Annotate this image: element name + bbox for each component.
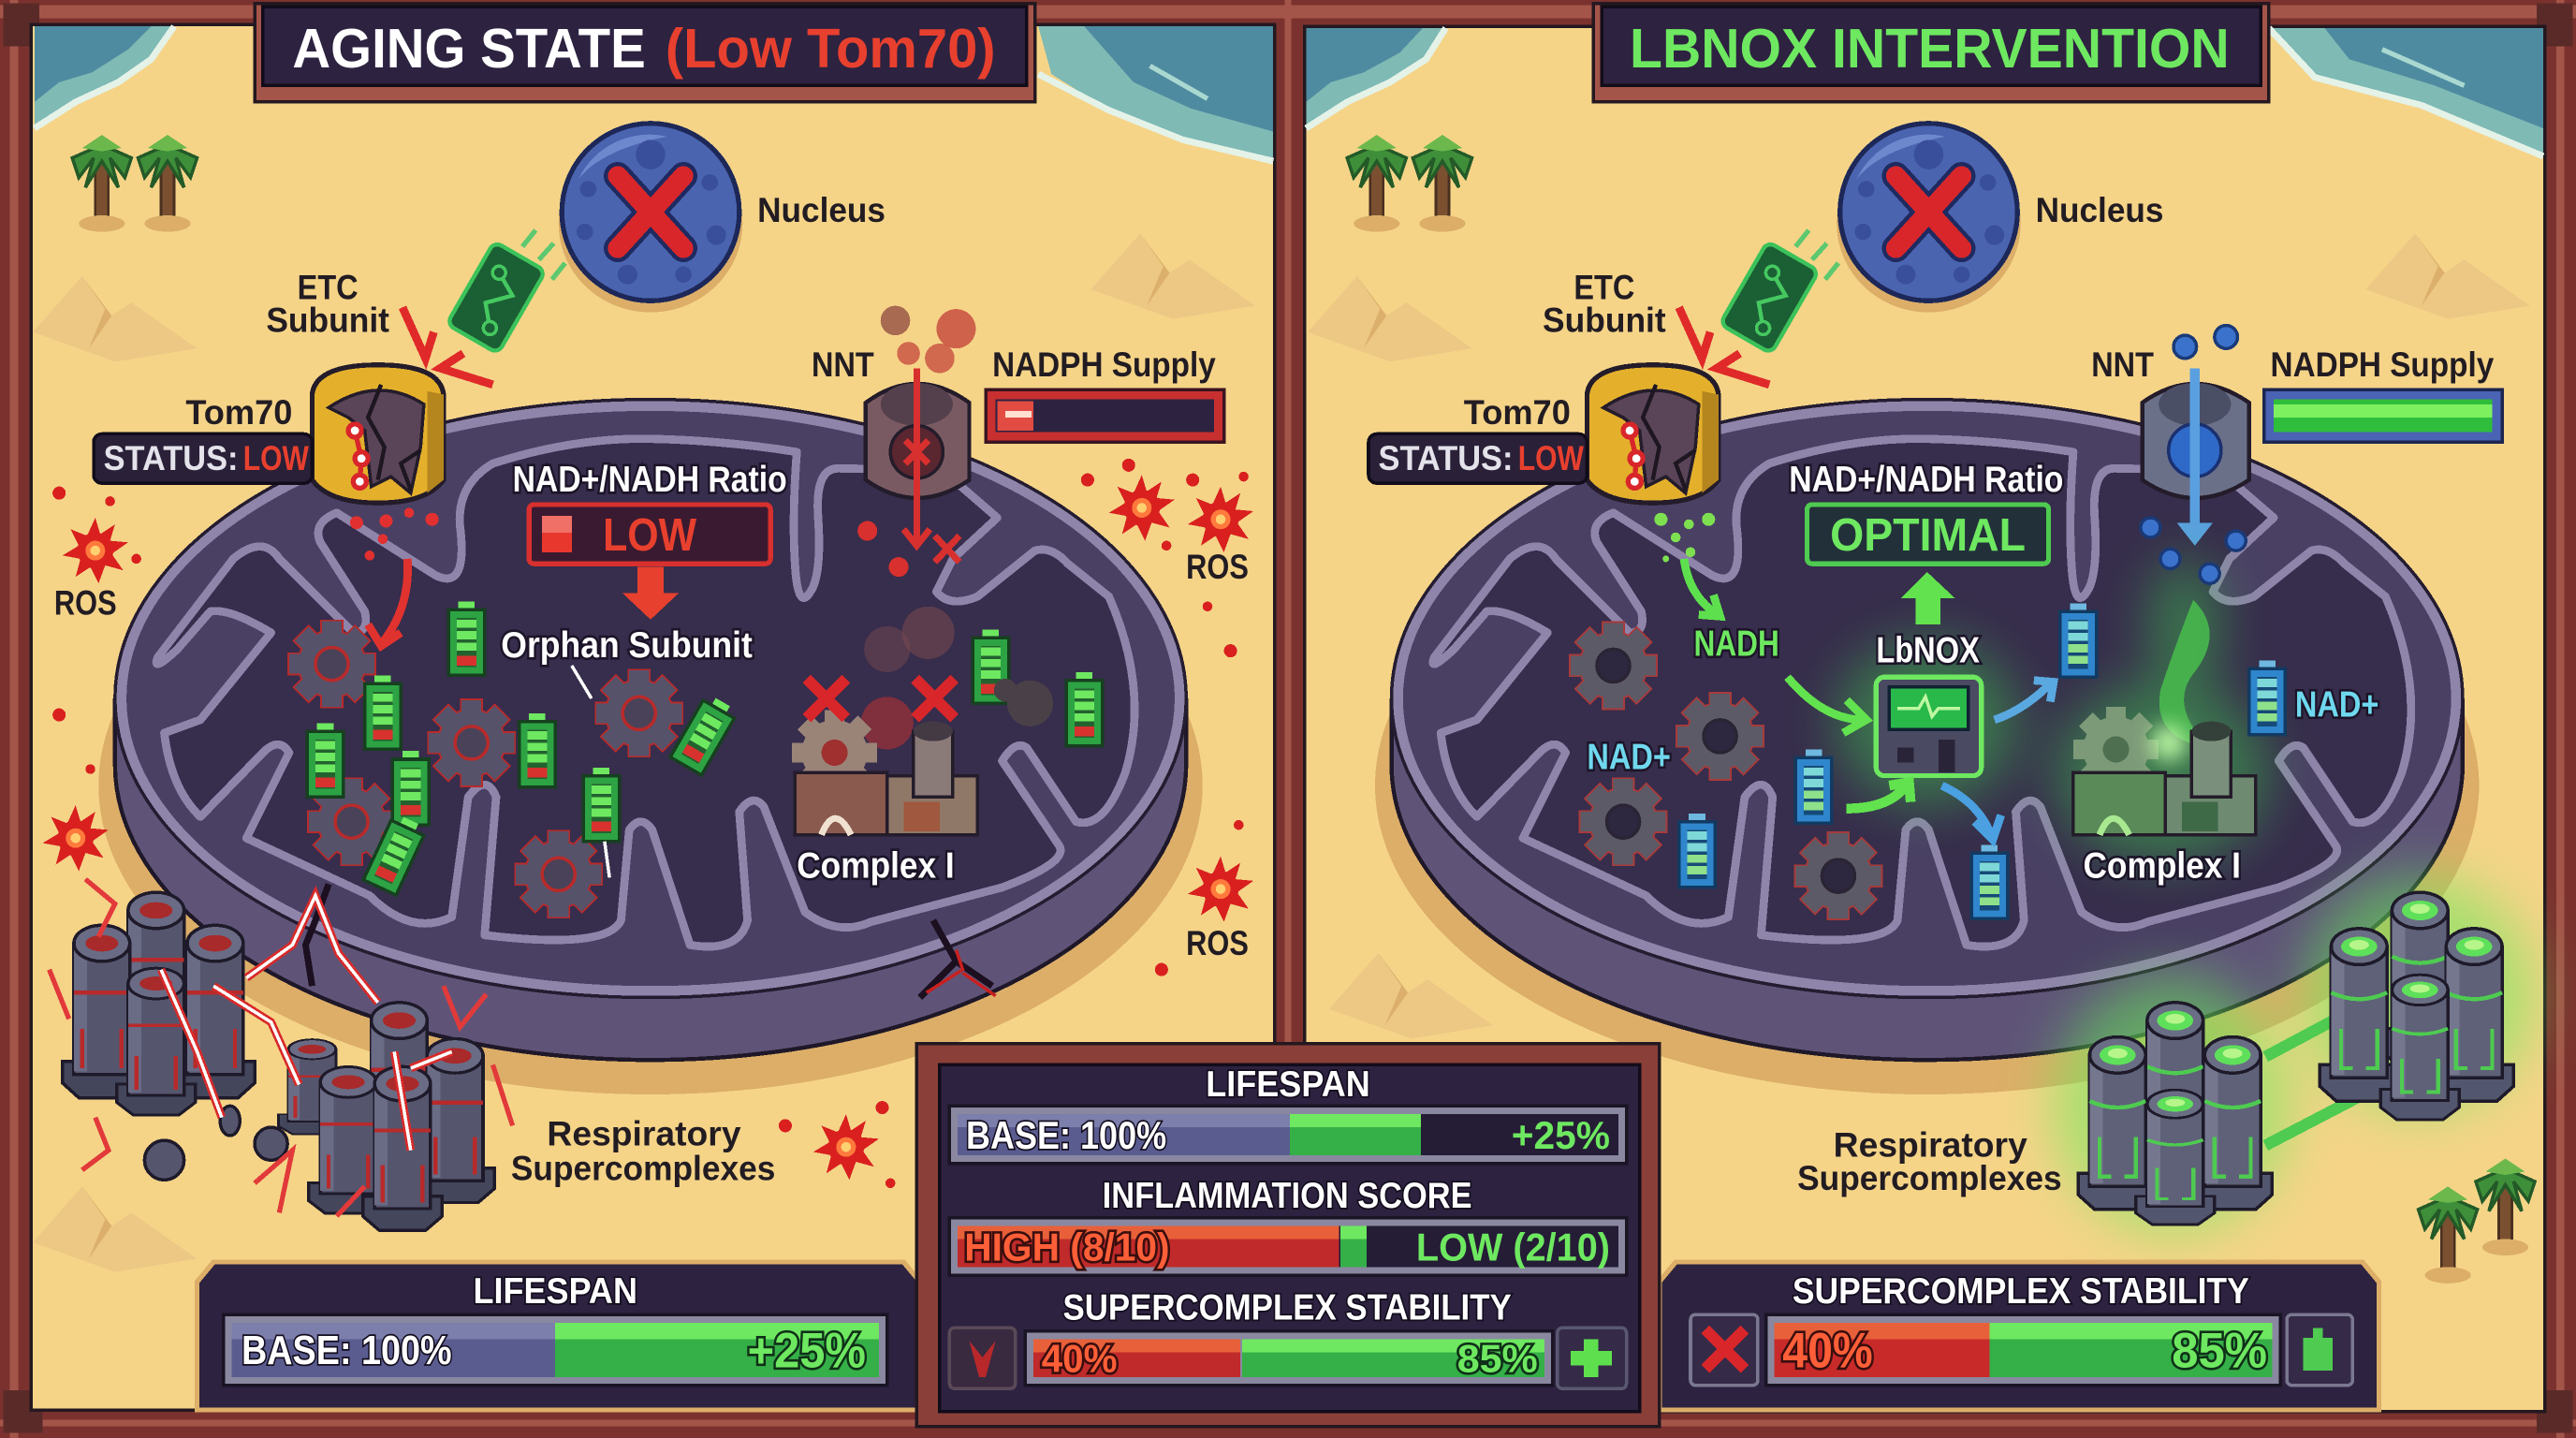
labels: lbnox panel: ETC bbox=[1573, 269, 1634, 307]
panel: aging lifespan: LIFESPAN bbox=[473, 1271, 637, 1312]
NADH ratio LOW box: LOW bbox=[603, 510, 697, 561]
labels: aging panel: ROS bbox=[1186, 548, 1249, 586]
labels: lbnox panel: Supercomplexes bbox=[1797, 1159, 2062, 1197]
labels: lbnox panel: NNT bbox=[2091, 345, 2154, 384]
icon: ETC subunit card, aging bbox=[446, 242, 546, 354]
panel: aging state sand background bbox=[31, 24, 1275, 1410]
title: aging bbox=[255, 4, 1035, 102]
inflammation row: HIGH (8/10) bbox=[964, 1225, 1170, 1269]
labels: aging panel: NADPH Supply bbox=[992, 345, 1216, 384]
panel: lbnox stability bbox=[1660, 1262, 2378, 1410]
labels: lbnox panel: Tom70 bbox=[1464, 393, 1571, 432]
panel: aging lifespan bbox=[198, 1262, 920, 1410]
Tom70 channel: aging bbox=[312, 365, 444, 503]
complex I: lbnox bbox=[2073, 707, 2256, 835]
labels: lbnox panel: Respiratory bbox=[1834, 1126, 2027, 1165]
labels: aging panel bbox=[54, 191, 1249, 1187]
panel: aging lifespan: +25% bbox=[748, 1323, 866, 1378]
icon: ETC subunit card, lbnox bbox=[1720, 242, 1819, 354]
palm trees bbox=[72, 135, 2535, 1284]
green fragments below Tom70 bbox=[1654, 513, 1715, 562]
Tom70 channel: lbnox bbox=[1587, 365, 1719, 503]
blue molecules below NNT bbox=[2141, 518, 2246, 583]
labels: aging panel: Respiratory bbox=[547, 1114, 741, 1152]
stability row: SUPERCOMPLEX STABILITY bbox=[1063, 1287, 1512, 1328]
arrow: out to battery upper bbox=[1995, 681, 2054, 720]
mitochondrion: lbnox bbox=[1375, 400, 2479, 1094]
labels: aging panel: Tom70 bbox=[185, 393, 292, 432]
leader lines: orphan subunit bbox=[572, 666, 609, 877]
NADH ratio LOW box bbox=[529, 505, 770, 564]
interior aging: batteries bbox=[305, 602, 1104, 897]
labels: lbnox interior bbox=[1587, 460, 2378, 886]
labels: lbnox panel bbox=[1464, 191, 2495, 1197]
smoke cloud right, aging bbox=[994, 679, 1053, 726]
water: right panel top left bbox=[1306, 28, 1445, 128]
labels: aging interior: Orphan Subunit bbox=[501, 625, 753, 666]
labels: aging panel: ROS bbox=[54, 584, 117, 623]
fragments below NNT, aging bbox=[857, 521, 959, 577]
title: lbnox bbox=[1593, 4, 2269, 102]
water foam: right panel top left bbox=[1306, 28, 1445, 128]
inflammation row: LOW (2/10) bbox=[1416, 1225, 1610, 1269]
panel: lbnox stability: 40% bbox=[1782, 1323, 1873, 1378]
title: aging: (Low Tom70) bbox=[666, 17, 996, 80]
labels: lbnox interior: NAD+/NADH Ratio bbox=[1789, 460, 2063, 500]
beams between supercomplexes bbox=[2265, 1005, 2389, 1145]
LbNOX machine bbox=[1876, 677, 1982, 776]
green glow around LbNOX and complex I bbox=[1837, 559, 2269, 863]
labels: lbnox interior: NAD+ bbox=[2295, 684, 2378, 725]
OPTIMAL box: OPTIMAL bbox=[1830, 510, 2026, 561]
water deep: left panel top left bbox=[35, 26, 151, 102]
stability row: 85% bbox=[1457, 1337, 1538, 1381]
panel: lbnox stability: 85% bbox=[2172, 1323, 2267, 1378]
cracks red edge bbox=[927, 950, 996, 996]
arrow: low ratio down bbox=[622, 567, 679, 620]
cracks in aging mitochondrion wall bbox=[305, 884, 992, 997]
arrow: NADH into LbNOX bbox=[1788, 677, 1866, 733]
arrow: fragments to gear bbox=[368, 559, 408, 646]
title: lbnox: LBNOX INTERVENTION bbox=[1630, 17, 2230, 80]
status badge: aging bbox=[94, 433, 312, 483]
green smoke bbox=[2159, 600, 2210, 748]
card motion streaks, aging bbox=[522, 230, 565, 280]
labels: aging interior: Complex I bbox=[797, 845, 955, 886]
labels: aging panel: Supercomplexes bbox=[511, 1149, 775, 1187]
card motion streaks, lbnox bbox=[1795, 230, 1838, 280]
labels: aging interior bbox=[501, 460, 955, 886]
NADPH bar: aging bbox=[986, 389, 1224, 442]
status badge: lbnox bbox=[1368, 433, 1587, 483]
nucleus: lbnox bbox=[1837, 124, 2021, 313]
panel: center comparison frame bbox=[916, 1044, 1660, 1427]
NADPH bar: lbnox bbox=[2264, 389, 2502, 442]
water deep: right panel top left bbox=[1306, 28, 1423, 102]
panel: aging lifespan: BASE: 100% bbox=[242, 1328, 452, 1373]
complex I: aging bbox=[792, 607, 977, 835]
stability row bbox=[949, 1287, 1627, 1388]
status badge: lbnox: LOW bbox=[1518, 439, 1584, 477]
ROS particles: aging panel bbox=[43, 459, 1253, 1188]
lifespan row bbox=[949, 1064, 1627, 1164]
icon: red chevrons, lbnox bbox=[1679, 307, 1769, 385]
supercomplexes: lbnox bbox=[2078, 892, 2513, 1225]
labels: lbnox panel: Subunit bbox=[1543, 301, 1666, 340]
supercomplexes: aging bbox=[63, 892, 494, 1230]
red fragments below Tom70 bbox=[350, 507, 439, 561]
arrow: green loop lower bbox=[1847, 783, 1910, 809]
nucleus: aging bbox=[559, 124, 742, 313]
lightning: aging supercomplexes bbox=[50, 879, 513, 1216]
sand dunes bbox=[33, 233, 2530, 1272]
arrow: up to optimal bbox=[1901, 572, 1955, 624]
water: left panel top right bbox=[1038, 26, 1273, 161]
interior lbnox: batteries bbox=[1677, 603, 2287, 920]
water: top left bbox=[35, 26, 174, 128]
arrow: blue to lower battery bbox=[1942, 785, 2001, 840]
panel: lbnox sand background bbox=[1305, 26, 2545, 1412]
arrow: to NADH bbox=[1684, 559, 1720, 616]
labels: lbnox panel: Nucleus bbox=[2036, 191, 2163, 229]
labels: aging panel: Nucleus bbox=[757, 191, 886, 229]
NNT channel: aging bbox=[866, 306, 976, 546]
labels: aging panel: ROS bbox=[1186, 924, 1249, 962]
water: right panel top right bbox=[2269, 28, 2543, 156]
red X marks on complex I bbox=[807, 679, 955, 718]
status badge: aging: LOW bbox=[243, 439, 309, 477]
lifespan row: LIFESPAN bbox=[1206, 1064, 1370, 1105]
inflammation row: INFLAMMATION SCORE bbox=[1103, 1176, 1472, 1216]
icon: red chevrons, aging bbox=[402, 307, 493, 385]
lifespan row: BASE: 100% bbox=[966, 1113, 1166, 1157]
water foam: left panel top left bbox=[35, 26, 174, 128]
interior aging: gears bbox=[289, 622, 681, 917]
status badge: lbnox: STATUS: bbox=[1379, 439, 1513, 477]
labels: lbnox interior: LbNOX bbox=[1876, 630, 1980, 670]
lifespan row: +25% bbox=[1512, 1113, 1610, 1157]
NNT channel: lbnox bbox=[2143, 326, 2249, 546]
stability row: 40% bbox=[1042, 1337, 1117, 1381]
panel: lbnox stability: SUPERCOMPLEX STABILITY bbox=[1793, 1271, 2249, 1312]
glow: lbnox supercomplexes bbox=[2054, 876, 2533, 1232]
labels: lbnox interior: NAD+ bbox=[1587, 738, 1671, 778]
labels: aging panel: NNT bbox=[812, 345, 874, 384]
mitochondrion: aging bbox=[98, 400, 1203, 1094]
labels: aging panel: ETC bbox=[298, 269, 359, 307]
status badge: aging: STATUS: bbox=[104, 439, 238, 477]
labels: aging panel: Subunit bbox=[266, 301, 389, 340]
labels: lbnox panel: NADPH Supply bbox=[2271, 345, 2495, 384]
interior lbnox: gears bbox=[1571, 623, 1881, 918]
labels: lbnox interior: Complex I bbox=[2083, 845, 2241, 886]
labels: aging interior: NAD+/NADH Ratio bbox=[513, 460, 787, 500]
title: aging: AGING STATE bbox=[292, 17, 646, 80]
labels: lbnox interior: NADH bbox=[1694, 624, 1779, 664]
inflammation row bbox=[949, 1176, 1627, 1275]
